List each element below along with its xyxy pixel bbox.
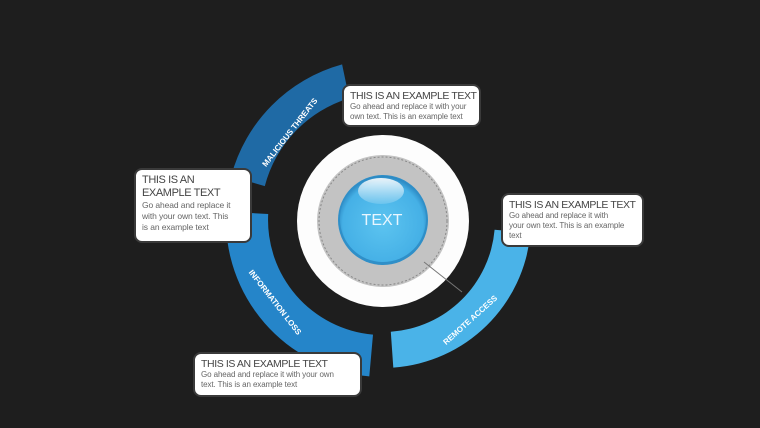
callout: right: Go ahead and replace it with: [509, 211, 608, 220]
callout: bottom: Go ahead and replace it with your own: [201, 370, 334, 379]
arc: malicious threats: [231, 64, 349, 186]
callout: left: with your own text. This: [142, 211, 228, 221]
arc: remote access: [391, 230, 530, 368]
callout: top: Go ahead and replace it with your: [350, 102, 466, 111]
callout: bottom: text. This is an example text: [201, 380, 297, 389]
callout: right: [501, 193, 644, 247]
callout: top: THIS IS AN EXAMPLE TEXT: [350, 90, 477, 102]
connector line: [424, 262, 462, 292]
center circle: TEXT: [362, 212, 403, 229]
callout: left: Go ahead and replace it: [142, 200, 230, 210]
callout: left: THIS IS AN: [142, 174, 194, 186]
arc: malicious threats: MALICIOUS THREATS: [261, 96, 320, 168]
arc: information loss: INFORMATION LOSS: [247, 268, 304, 337]
callout: bottom: [193, 352, 362, 397]
callout: top: [342, 84, 481, 127]
callout: right: text: [509, 231, 522, 240]
callout: left: is an example text: [142, 222, 209, 232]
callout: top: own text. This is an example text: [350, 112, 463, 121]
callout: right: your own text. This is an example: [509, 221, 624, 230]
arc: information loss: [226, 212, 373, 376]
arc: remote access: REMOTE ACCESS: [441, 293, 500, 347]
center circle: [297, 135, 469, 307]
callout: bottom: THIS IS AN EXAMPLE TEXT: [201, 358, 328, 370]
callout: right: THIS IS AN EXAMPLE TEXT: [509, 199, 636, 211]
callout: left: EXAMPLE TEXT: [142, 187, 220, 199]
callout: left: [134, 168, 252, 243]
